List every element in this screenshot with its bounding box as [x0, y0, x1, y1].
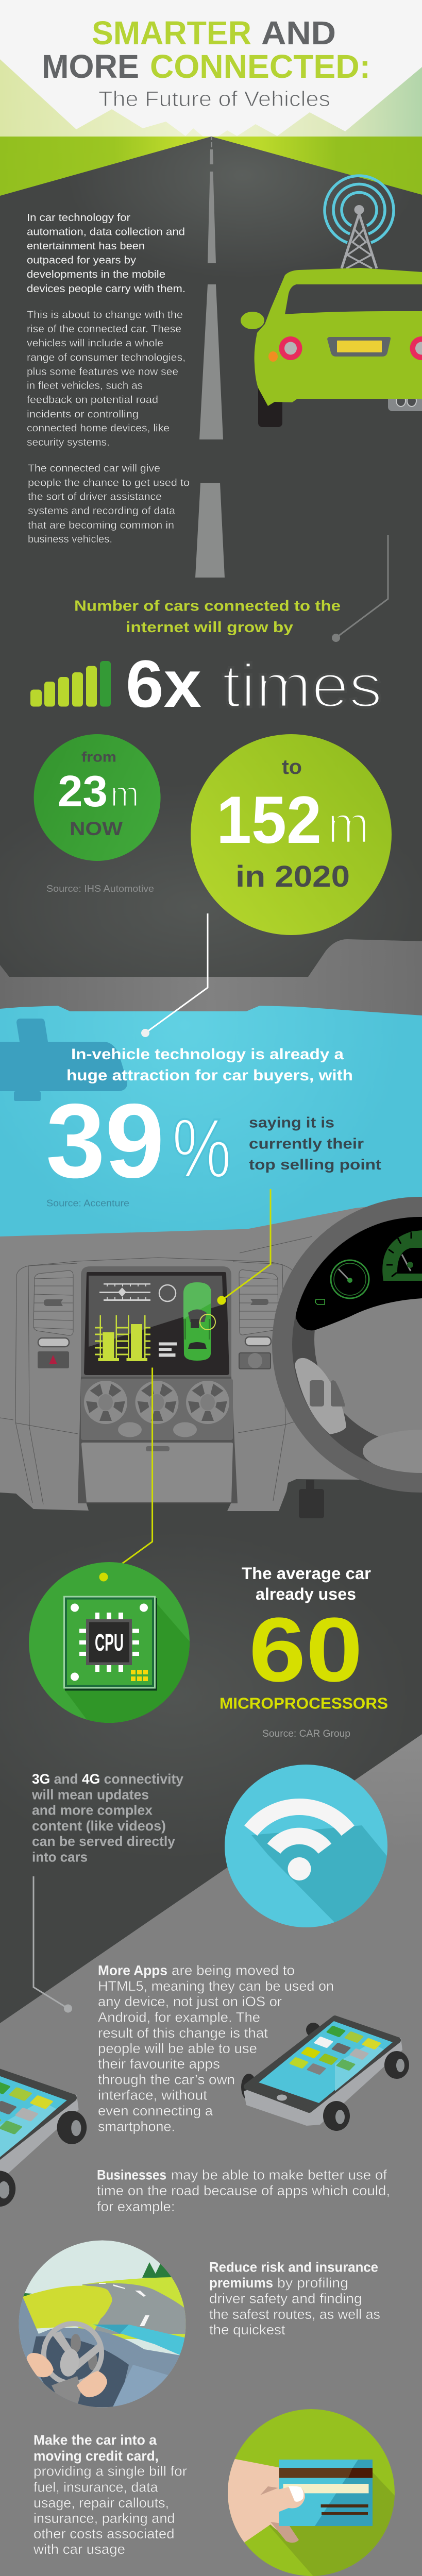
big stat: 6x times	[126, 646, 382, 721]
icon: green car rear view	[241, 268, 422, 427]
title: MORE	[42, 48, 139, 85]
intro text: systems and recording of data	[28, 505, 176, 517]
text: 3G and 4G: content (like videos)	[32, 1818, 166, 1834]
intro text	[27, 212, 190, 545]
steering wheel	[272, 1197, 422, 1493]
stat: 60 microprocessors: MICROPROCESSORS	[220, 1694, 388, 1713]
stat: 60 microprocessors: already uses	[256, 1585, 356, 1603]
text: more apps: HTML5, meaning they can be used on	[98, 1978, 334, 1994]
text: businesses: Businesses	[97, 2167, 166, 2183]
circle: to 152m in 2020: 152	[216, 782, 322, 857]
text: 3G and 4G	[31, 1771, 183, 1865]
text: top selling point: saying it is	[249, 1114, 334, 1131]
text: 3G and 4G: 3G and 4G connectivity	[32, 1771, 183, 1787]
intro text: automation, data collection and	[27, 227, 185, 238]
text: moving credit card: Make the car into a	[33, 2432, 157, 2448]
icon: smartphone car left	[0, 2072, 87, 2207]
intro text: business vehicles.	[28, 534, 112, 545]
stat heading	[74, 598, 341, 636]
text: reduce risk: driver safety and finding	[209, 2291, 362, 2307]
title	[42, 14, 370, 111]
circle: to 152m in 2020: to	[282, 756, 302, 778]
text: reduce risk: by profiling	[277, 2275, 348, 2291]
source: CAR Group: Source: CAR Group	[262, 1728, 350, 1739]
grey connector line	[33, 1876, 72, 2012]
circle: to 152m in 2020	[191, 734, 392, 935]
connector line to stats	[332, 535, 388, 642]
intro text: connected home devices, like	[27, 423, 170, 434]
text: top selling point: currently their	[249, 1136, 364, 1152]
right vent	[239, 1270, 278, 1335]
intro text: security systems.	[27, 437, 110, 448]
intro text: feedback on potential road	[27, 395, 158, 406]
text: more apps: their favourite apps	[98, 2056, 220, 2072]
circle: from 23m now	[34, 734, 161, 861]
screen bar chart	[95, 1315, 150, 1361]
text: reduce risk: the safest routes, as well as	[209, 2307, 380, 2322]
buttons	[38, 1337, 271, 1369]
text: moving credit card: other costs associated	[33, 2526, 174, 2541]
road centre line	[195, 137, 225, 578]
icon: wifi	[225, 1765, 387, 1927]
steering spoke controls	[295, 1358, 346, 1434]
left vent	[33, 1270, 73, 1335]
circle: from 23m now: m	[110, 774, 139, 814]
circle: from 23m now: 23	[58, 767, 108, 816]
text: more apps: Android, for example. The	[98, 2009, 260, 2025]
text: more apps: smartphone.	[98, 2119, 175, 2134]
circle: to 152m in 2020: m	[327, 795, 369, 854]
text: businesses: for example:	[97, 2199, 175, 2214]
text: car buyers: In-vehicle technology is already a	[71, 1046, 344, 1063]
text: car buyers: huge attraction for car buyers, with	[66, 1067, 353, 1084]
text: businesses: may be able to make better use of	[171, 2167, 387, 2183]
text: businesses	[97, 2167, 390, 2214]
panel: windscreen and dashboard top	[0, 939, 422, 1247]
text: businesses: time on the road because of apps which could,	[97, 2183, 390, 2198]
intro text: outpaced for years by	[27, 255, 136, 266]
dashboard trim lines	[0, 1236, 312, 1504]
text: moving credit card: fuel, insurance, data	[33, 2479, 158, 2495]
yellow connector to screen	[217, 1189, 271, 1304]
text: more apps: interface, without	[98, 2088, 208, 2103]
panel: dashboard	[0, 1197, 422, 1518]
intro text: rise of the connected car. These	[27, 324, 181, 335]
text: reduce risk: the quickest	[209, 2322, 285, 2337]
icon: credit card in hand	[228, 2409, 395, 2576]
text: moving credit card: usage, repair callouts,	[33, 2495, 169, 2511]
intro text: This is about to change with the	[27, 310, 183, 321]
intro text: people the chance to get used to	[28, 477, 190, 488]
text: more apps: are being moved to	[172, 1962, 295, 1978]
source: IHS Automotive: Source: IHS Automotive	[46, 884, 154, 894]
text: more apps: people will be able to use	[98, 2041, 257, 2056]
intro text: The connected car will give	[28, 463, 160, 474]
icon: smartphone car right	[241, 2019, 409, 2131]
intro text: that are becoming common in	[28, 520, 174, 531]
big stat: 39%: 39	[46, 1082, 164, 1200]
glovebox	[81, 1443, 233, 1502]
intro text: vehicles will include a whole	[27, 338, 163, 349]
text: more apps: even connecting a	[98, 2103, 213, 2119]
stat: 60 microprocessors	[220, 1564, 388, 1713]
instrument cluster	[295, 1206, 422, 1330]
big stat: 39%: %	[172, 1101, 231, 1195]
intro text: devices people carry with them.	[27, 283, 185, 295]
stat: 60 microprocessors: The average car	[242, 1564, 371, 1583]
icon: signal tower	[325, 176, 394, 268]
grass	[0, 137, 422, 198]
intro text: entertainment has been	[27, 241, 145, 252]
icon: driving scene	[15, 2240, 191, 2411]
text: moving credit card	[33, 2432, 187, 2557]
circle: from 23m now: from	[81, 749, 116, 765]
circle: to 152m in 2020: in 2020	[235, 860, 350, 893]
big stat: 6x times: 6x	[126, 646, 201, 721]
intro text: incidents or controlling	[27, 409, 139, 420]
text: car buyers	[66, 1046, 353, 1084]
stat heading: Number of cars connected to the	[74, 598, 341, 614]
text: moving credit card: with car usage	[33, 2541, 125, 2557]
intro text: plus some features we now see	[27, 366, 178, 378]
panel: grey wedge background	[0, 1734, 422, 2576]
intro text: the sort of driver assistance	[28, 492, 162, 503]
text: more apps: result of this change is that	[98, 2025, 268, 2041]
intro text: in fleet vehicles, such as	[27, 380, 143, 392]
text: reduce risk: Reduce risk and insurance	[209, 2260, 378, 2275]
source: Accenture: Source: Accenture	[46, 1198, 129, 1209]
text: moving credit card: providing a single bill for	[33, 2463, 187, 2479]
yellow connector to CPU	[104, 1367, 153, 1577]
text: reduce risk: premiums	[209, 2275, 273, 2291]
circle: from 23m now: NOW	[70, 818, 123, 839]
big stat: 39%	[46, 1082, 231, 1200]
text: more apps: More Apps	[98, 1962, 167, 1978]
text: top selling point	[249, 1114, 381, 1173]
text: 3G and 4G: and more complex	[32, 1802, 153, 1818]
intro text: range of consumer technologies,	[27, 352, 185, 363]
text: moving credit card: insurance, parking and	[33, 2511, 175, 2526]
stat heading: internet will grow by	[126, 619, 293, 636]
text: more apps: through the car’s own	[98, 2072, 235, 2088]
white connector line	[141, 913, 208, 1037]
text: more apps	[98, 1962, 334, 2134]
text: 3G and 4G: can be served directly	[32, 1834, 175, 1849]
title: AND	[261, 14, 336, 52]
rear-view mirror	[0, 1019, 127, 1101]
screen car icon	[183, 1282, 215, 1361]
text: 3G and 4G: will mean updates	[31, 1787, 149, 1802]
title: SMARTER	[92, 14, 251, 52]
big stat: 6x times: times	[222, 652, 382, 720]
pedal	[299, 1480, 324, 1518]
text: more apps: any device, not just on iOS or	[98, 1994, 282, 2009]
intro text: In car technology for	[27, 212, 130, 224]
centre console	[78, 1377, 238, 1503]
icon: CPU	[29, 1562, 196, 1731]
mountains	[0, 59, 422, 137]
road and dark background	[0, 72, 422, 2040]
icon: CPU: CPU	[95, 1629, 124, 1656]
text: reduce risk	[209, 2260, 380, 2337]
title: The Future of Vehicles	[98, 87, 330, 111]
climate fans	[84, 1381, 229, 1437]
slider display	[99, 1283, 150, 1301]
text: moving credit card: moving credit card,	[33, 2448, 159, 2464]
stat: 60 microprocessors: 60	[249, 1599, 363, 1701]
intro text: developments in the mobile	[27, 269, 165, 280]
icon: signal bars	[30, 661, 111, 707]
infotainment screen	[81, 1266, 231, 1377]
text: top selling point: top selling point	[249, 1157, 381, 1173]
text: 3G and 4G: into cars	[32, 1849, 88, 1865]
title: CONNECTED:	[150, 48, 370, 85]
